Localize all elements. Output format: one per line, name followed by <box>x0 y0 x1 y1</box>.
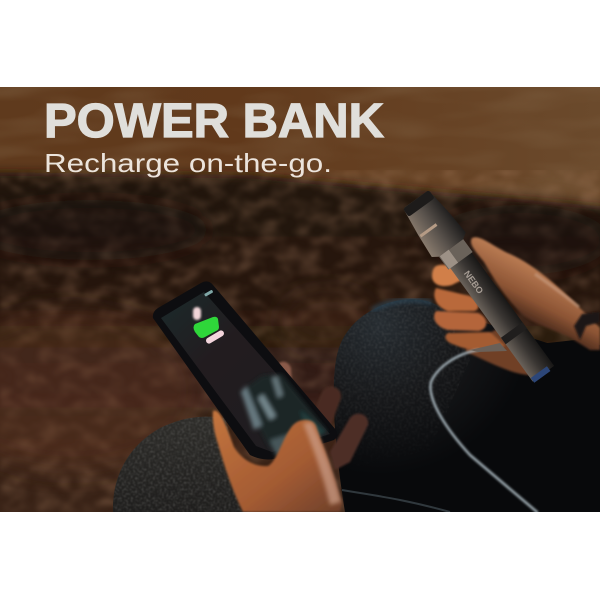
tube end <box>531 366 550 383</box>
photo <box>0 87 600 512</box>
hand edge highlight <box>535 274 579 307</box>
phone screen <box>161 292 330 452</box>
focus collar <box>439 239 473 270</box>
phone hand <box>213 411 342 512</box>
metallic ring <box>419 223 437 237</box>
dark sleeve <box>548 340 600 360</box>
NEBO mark: NEBO <box>462 269 485 296</box>
phone <box>153 281 337 460</box>
right knee and lap <box>334 298 547 512</box>
screen wallpaper <box>240 374 328 456</box>
fingers behind phone <box>275 362 368 470</box>
charge label <box>206 330 224 344</box>
wrist band <box>574 312 600 340</box>
flashlight <box>404 191 554 383</box>
thumb highlight <box>303 422 341 505</box>
cable <box>430 350 537 512</box>
left knee <box>110 410 250 512</box>
cable to phone <box>342 490 450 512</box>
flashlight lens rim <box>404 191 434 216</box>
flashlight hand <box>471 237 600 350</box>
charging connector <box>470 343 507 352</box>
lock icon <box>193 307 201 320</box>
green battery <box>194 317 219 338</box>
flashlight head <box>404 195 466 257</box>
phone body <box>153 281 337 460</box>
subtitle: Recharge on-the-go. <box>44 148 332 178</box>
status icon <box>204 290 213 296</box>
flashlight palm and fingers <box>432 265 530 375</box>
ground backdrop <box>0 87 600 512</box>
charge port ring <box>501 326 522 344</box>
flashlight body <box>449 251 554 381</box>
title: POWER BANK <box>44 95 384 148</box>
